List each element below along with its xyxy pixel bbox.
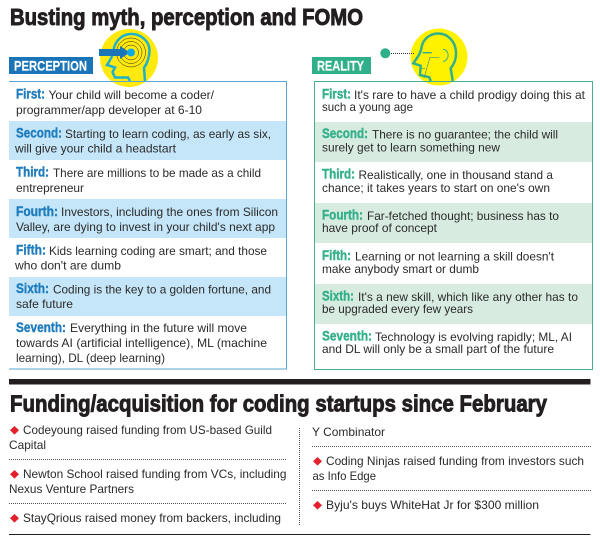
perception third: There are millions to be made as a child — [53, 166, 261, 180]
perception seventh — [16, 319, 267, 365]
item: Byju's: Byju's buys WhiteHat Jr for $300 million — [326, 498, 539, 512]
label: perception: PERCEPTION — [14, 58, 87, 74]
reality second: There is no guarantee; the child will — [372, 128, 558, 142]
item: Coding Ninjas: as Info Edge — [312, 469, 376, 483]
item: Newton School: Newton School raised funding from VCs, including — [23, 467, 286, 481]
perception panel border — [9, 82, 286, 369]
perception fourth: Fourth: — [16, 203, 58, 219]
panel: perception — [9, 29, 287, 369]
perception sixth: Sixth: — [16, 280, 49, 296]
perception fifth: Kids learning coding are smart; and those — [49, 244, 267, 258]
reality second: surely get to learn something new — [322, 140, 500, 154]
reality seventh: and DL will only be a small part of the future — [322, 342, 554, 356]
perception second: Starting to learn coding, as early as six, — [65, 127, 271, 141]
item: Coding Ninjas — [312, 454, 584, 483]
reality row backgrounds — [314, 81, 592, 369]
item: Coding Ninjas: Coding Ninjas raised funding from investors such — [326, 454, 584, 468]
perception fourth — [16, 203, 278, 234]
reality third: Third: — [322, 166, 355, 182]
item: Codeyoung: Codeyoung raised funding from US-based Guild — [23, 423, 272, 437]
reality fifth: Fifth: — [322, 247, 351, 263]
perception sixth: safe future — [16, 297, 73, 311]
reality fourth: Far-fetched thought; business has to — [367, 209, 559, 223]
heading: funding: Funding/acquisition for coding startups since February — [10, 390, 547, 416]
label: reality: REALITY — [317, 58, 365, 74]
perception third: Third: — [16, 164, 49, 180]
reality seventh: Technology is evolving rapidly; ML, AI — [375, 330, 572, 344]
perception first: programmer/app developer at 6-10 — [16, 103, 202, 117]
perception sixth: Coding is the key to a golden fortune, and — [53, 282, 271, 296]
reality fifth: Learning or not learning a skill doesn't — [355, 250, 555, 264]
item: Codeyoung — [9, 423, 272, 452]
perception seventh: Everything in the future will move — [70, 321, 247, 335]
list: funding left column — [9, 423, 287, 525]
reality fifth — [322, 247, 555, 276]
reality sixth: Sixth: — [322, 288, 354, 304]
perception first: First: — [16, 86, 45, 102]
item: StayQrious: StayQrious raised money from backers, including — [23, 511, 281, 525]
title: Busting myth, perception and FOMO — [10, 4, 363, 30]
perception first — [16, 86, 215, 117]
perception second — [14, 124, 271, 156]
perception row backgrounds — [9, 81, 287, 369]
item: Codeyoung: Capital — [9, 438, 46, 452]
reality seventh — [322, 328, 572, 356]
perception sixth — [16, 280, 271, 311]
reality third — [322, 166, 553, 195]
perception second: Second: — [16, 124, 62, 140]
reality third: chance; it takes years to start on one's own — [322, 181, 550, 195]
reality first: First: — [322, 86, 351, 102]
perception seventh: Seventh: — [16, 319, 66, 335]
perception fourth: Investors, including the ones from Silicon — [61, 205, 278, 219]
reality seventh: Seventh: — [322, 328, 372, 344]
reality third: Realistically, one in thousand stand a — [358, 168, 553, 182]
list: funding right column — [312, 425, 591, 512]
item: Y Combinator: Y Combinator — [312, 425, 385, 439]
reality first: It's rare to have a child prodigy doing this at — [354, 88, 586, 102]
panel: reality — [312, 28, 592, 370]
reality panel border — [314, 82, 592, 370]
icon: head with dotted line — [380, 28, 468, 86]
perception fifth: Fifth: — [16, 242, 46, 258]
reality first — [322, 86, 586, 114]
perception seventh: towards AI (artificial intelligence), ML (machine — [16, 336, 267, 350]
reality second: Second: — [322, 125, 368, 141]
perception fifth — [14, 242, 267, 272]
perception fourth: Valley, are dying to invest in your child's next app — [16, 220, 275, 234]
perception seventh: learning), DL (deep learning) — [16, 351, 165, 365]
icon: head with arrow — [99, 29, 158, 87]
perception fifth: who don't are dumb — [14, 258, 121, 272]
reality fourth: Fourth: — [322, 206, 363, 222]
reality sixth — [322, 288, 578, 316]
item: Newton School — [9, 467, 286, 496]
reality second — [322, 125, 558, 154]
reality fourth: have proof of concept — [322, 221, 438, 235]
reality first: such a young age — [322, 100, 413, 114]
reality fourth — [322, 206, 559, 235]
perception third: entrepreneur — [16, 181, 84, 195]
reality sixth: It's a new skill, which like any other has to — [358, 290, 578, 304]
item: Newton School: Nexus Venture Partners — [9, 482, 134, 496]
perception first: Your child will become a coder/ — [48, 88, 215, 102]
perception second: will give your child a headstart — [14, 142, 177, 156]
reality sixth: be upgraded every few years — [322, 302, 473, 316]
reality fifth: make anybody smart or dumb — [322, 262, 479, 276]
perception third — [16, 164, 261, 195]
